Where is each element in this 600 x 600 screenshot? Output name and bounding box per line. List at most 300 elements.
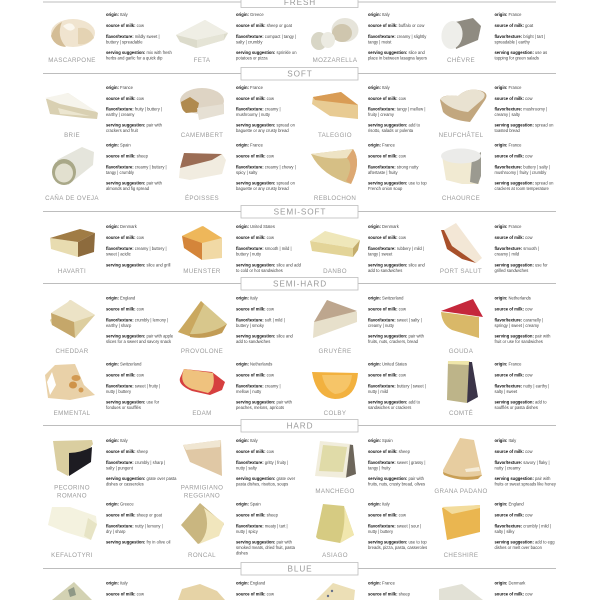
details: taleggio: Italy: [381, 85, 391, 90]
details: port salut: France: [507, 224, 522, 229]
details: havarti: creamy | buttery |: [134, 246, 167, 251]
details: reblochon: cow: [397, 154, 406, 158]
details: chaource: spread on: [534, 180, 554, 186]
details: muenster: to cold or hot sandwiches: [236, 268, 283, 273]
details: grana padano: savory | flaky |: [522, 460, 550, 465]
details: chaource: cow: [524, 154, 532, 158]
icon: blue cheese 2: [178, 584, 225, 600]
details: havarti: flavor/texture:: [106, 246, 134, 251]
details: cana de oveja: creamy | buttery |: [134, 164, 167, 170]
details: havarti: source of milk:: [106, 235, 135, 240]
name: provolone: PROVOLONE: [181, 348, 223, 355]
details: blue 3: sheep: [397, 592, 411, 596]
details: camembert: creamy |: [264, 106, 281, 112]
details: epoisses: cow: [265, 154, 274, 158]
icon: gruyere: [313, 300, 357, 338]
details: pecorino romano: Italy: [119, 438, 129, 443]
details: cheddar: England: [119, 296, 136, 300]
details: grana padano: serving suggestion:: [494, 476, 534, 481]
details: asiago: sweet | sour |: [396, 524, 421, 528]
details: parmigiano reggiano: flavor/texture:: [236, 460, 264, 465]
details: danbo: Denmark: [381, 224, 400, 229]
details: comte: source of milk:: [494, 372, 524, 378]
details: roncal: nutty | spicy: [236, 529, 259, 534]
card: havarti: [50, 224, 171, 275]
details: parmigiano reggiano: grate over: [275, 476, 296, 481]
details: manchego: pair with: [407, 476, 425, 481]
details: provolone: slice and: [275, 334, 294, 338]
details: neufchatel: creamy | salty: [494, 112, 521, 117]
details: muenster: serving suggestion:: [236, 262, 275, 268]
details: havarti: serving suggestion:: [106, 262, 145, 268]
details: chevre: origin:: [494, 12, 507, 17]
card: emmental: [45, 362, 160, 417]
details: neufchatel: toasted bread: [494, 128, 521, 133]
details: gruyere: sweet | salty |: [396, 318, 422, 322]
details: neufchatel: cow: [524, 96, 532, 101]
icon: epoisses: [179, 153, 226, 180]
details: asiago: cow: [397, 512, 406, 518]
details: asiago: use to top: [407, 540, 427, 544]
details: provolone: add to sandwiches: [236, 339, 270, 344]
details: roncal: source of milk:: [236, 512, 265, 518]
details: mascarpone: buttery | spreadable: [106, 40, 143, 44]
details: colby: United States: [381, 362, 407, 366]
details: edam: source of milk:: [236, 372, 265, 378]
name: chevre: CHÈVRE: [447, 57, 475, 64]
details: grana padano: flavor/texture:: [494, 460, 522, 465]
details: blue 4: origin:: [494, 580, 507, 586]
details: brie: flavor/texture:: [106, 106, 134, 112]
details: grana padano: fruits or sweet spreads like honey: [494, 482, 557, 486]
details: brie: crackers and fruit: [106, 128, 139, 133]
details: kefalotyri: serving suggestion:: [106, 540, 145, 544]
details: reblochon: source of milk:: [368, 154, 397, 158]
details: provolone: origin:: [236, 296, 249, 300]
details: cheddar: cow: [135, 306, 144, 312]
icon: cheddar: [50, 300, 95, 338]
name: manchego: MANCHEGO: [315, 488, 355, 495]
details: emmental: sweet | fruity |: [134, 384, 160, 388]
details: brie: serving suggestion:: [106, 122, 145, 128]
details: gruyere: serving suggestion:: [368, 334, 407, 338]
icon: feta: [176, 20, 228, 48]
details: parmigiano reggiano: cow: [265, 449, 274, 454]
name: kefalotyri: KEFALOTYRI: [51, 552, 93, 559]
section heading: semi-hard: SEMI-HARD: [273, 280, 327, 289]
details: brie: source of milk:: [106, 96, 135, 101]
details: colby: add to: [407, 400, 421, 404]
details: mozzarella: serving suggestion:: [368, 50, 407, 55]
icon: cana de oveja: [52, 147, 94, 185]
details: manchego: tangy | fruity: [368, 466, 391, 470]
details: grana padano: cow: [524, 449, 532, 454]
details: blue 3: source of milk:: [368, 592, 397, 596]
details: epoisses: flavor/texture:: [236, 164, 264, 170]
details: emmental: Switzerland: [119, 362, 142, 366]
details: feta: source of milk:: [236, 23, 265, 28]
details: epoisses: source of milk:: [236, 154, 265, 158]
icon: havarti: [50, 229, 95, 257]
details: cheddar: serving suggestion:: [106, 334, 145, 338]
details: cheddar: source of milk:: [106, 306, 135, 312]
details: comte: nutty | earthy |: [522, 384, 549, 388]
section heading: fresh: [43, 0, 556, 8]
details: mascarpone: serving suggestion:: [106, 50, 145, 55]
details: port salut: use for: [534, 262, 548, 268]
details: colby: source of milk:: [368, 372, 397, 378]
icon: muenster: [182, 226, 222, 260]
card: blue 3: [316, 580, 411, 600]
details: chaource: mushroomy | fruity | crumbly: [494, 170, 547, 175]
details: kefalotyri: source of milk:: [106, 512, 135, 518]
details: gruyere: Switzerland: [381, 296, 404, 300]
icon: edam: [180, 369, 225, 395]
details: cheshire: source of milk:: [494, 512, 524, 518]
card: cheshire: [442, 502, 555, 559]
details: muenster: cow: [265, 235, 274, 240]
details: feta: sprinkle on: [275, 50, 297, 55]
details: gouda: fruit or use for sandwiches: [494, 339, 543, 344]
details: comte: salty | sweet: [494, 389, 518, 394]
details: blue 1: source of milk:: [106, 592, 135, 596]
details: gruyere: source of milk:: [368, 306, 397, 312]
details: gouda: origin:: [494, 296, 507, 300]
card: pecorino romano: [53, 438, 177, 500]
name: port salut: PORT SALUT: [440, 268, 482, 275]
details: parmigiano reggiano: serving suggestion:: [236, 476, 275, 481]
details: edam: cow: [265, 372, 274, 378]
details: port salut: cow: [524, 235, 532, 240]
icon: emmental: [45, 364, 95, 400]
card: roncal: [181, 502, 296, 559]
section heading: semi-hard: [43, 278, 556, 290]
details: danbo: flavor/texture:: [368, 246, 396, 251]
details: neufchatel: serving suggestion:: [494, 122, 534, 128]
details: brie: fruity | buttery |: [134, 106, 162, 112]
name: roncal: RONCAL: [188, 552, 216, 559]
details: brie: earthy | creamy: [106, 112, 135, 117]
details: kefalotyri: origin:: [106, 502, 119, 506]
details: gouda: source of milk:: [494, 306, 524, 312]
details: comte: add to: [534, 400, 547, 404]
details: blue 2: source of milk:: [236, 592, 265, 596]
details: chevre: serving suggestion:: [494, 50, 534, 55]
details: mascarpone: flavor/texture:: [106, 34, 134, 39]
details: cheddar: earthy | sharp: [106, 323, 132, 328]
details: muenster: source of milk:: [236, 235, 265, 240]
name: asiago: ASIAGO: [322, 552, 348, 559]
details: taleggio: tangy | mellow |: [396, 106, 425, 112]
details: cana de oveja: serving suggestion:: [106, 180, 145, 186]
details: colby: origin:: [368, 362, 381, 366]
details: asiago: serving suggestion:: [368, 540, 407, 544]
details: blue 1: Italy: [119, 580, 129, 586]
details: roncal: serving suggestion:: [236, 540, 275, 544]
name: edam: EDAM: [192, 410, 212, 417]
details: blue 2: cow: [265, 592, 274, 596]
card: taleggio: [312, 85, 425, 139]
details: danbo: origin:: [368, 224, 381, 229]
details: kefalotyri: sheep or goat: [135, 512, 163, 518]
details: mozzarella: tangy | moist: [368, 40, 392, 44]
details: emmental: nutty | buttery: [106, 389, 132, 394]
details: roncal: pair with: [275, 540, 293, 544]
details: muenster: slice and add: [275, 262, 302, 268]
details: feta: salty | crumbly: [236, 40, 263, 44]
details: camembert: source of milk:: [236, 96, 265, 101]
details: chevre: France: [507, 12, 522, 17]
details: blue 4: Denmark: [507, 580, 526, 586]
details: cana de oveja: sheep: [135, 154, 149, 158]
name: gruyere: GRUYÈRE: [318, 348, 352, 355]
details: mozzarella: flavor/texture:: [368, 34, 396, 39]
icon: camembert: [180, 88, 224, 120]
details: manchego: serving suggestion:: [368, 476, 407, 481]
details: parmigiano reggiano: Italy: [249, 438, 259, 443]
section heading: blue: BLUE: [288, 565, 312, 574]
details: roncal: flavor/texture:: [236, 524, 264, 528]
details: edam: origin:: [236, 362, 249, 366]
details: cheshire: cow: [524, 512, 532, 518]
details: taleggio: origin:: [368, 85, 381, 90]
details: gruyere: origin:: [368, 296, 381, 300]
card: chaource: [441, 142, 554, 202]
name: pecorino romano: PECORINO: [54, 484, 90, 492]
details: provolone: Italy: [249, 296, 259, 300]
details: gouda: flavor/texture:: [494, 318, 522, 322]
details: emmental: cow: [135, 372, 144, 378]
details: camembert: origin:: [236, 85, 249, 90]
card: chevre: [440, 12, 547, 64]
details: reblochon: France: [381, 142, 396, 148]
details: reblochon: aftertaste | fruity: [368, 170, 399, 175]
icon: kefalotyri: [48, 507, 97, 540]
details: epoisses: origin:: [236, 142, 249, 148]
name: taleggio: TALEGGIO: [318, 132, 352, 139]
details: cana de oveja: Spain: [119, 142, 131, 148]
name: parmigiano reggiano: REGGIANO: [184, 492, 220, 500]
details: gruyere: flavor/texture:: [368, 318, 396, 322]
icon: roncal: [181, 503, 224, 544]
details: neufchatel: spread on: [534, 122, 554, 128]
details: taleggio: serving suggestion:: [368, 122, 407, 128]
details: taleggio: flavor/texture:: [368, 106, 396, 112]
details: epoisses: spread on: [275, 180, 296, 186]
icon: pecorino romano: [53, 440, 93, 476]
details: mascarpone: herbs and garlic for a quick dip: [106, 56, 163, 60]
icon: parmigiano reggiano: [183, 440, 222, 476]
details: blue 4: source of milk:: [494, 592, 524, 596]
details: roncal: origin:: [236, 502, 249, 506]
details: mozzarella: slice and: [407, 50, 426, 55]
details: chaource: France: [507, 142, 522, 148]
card: grana padano: [434, 438, 557, 495]
name: grana padano: GRANA PADANO: [434, 488, 488, 495]
details: brie: origin:: [106, 85, 119, 90]
icon: brie: [45, 93, 98, 119]
name: neufchatel: NEUFCHÂTEL: [439, 132, 484, 139]
details: reblochon: origin:: [368, 142, 381, 148]
details: gruyere: creamy | nutty: [368, 323, 395, 328]
details: danbo: source of milk:: [368, 235, 397, 240]
details: muenster: United States: [249, 224, 275, 229]
details: pecorino romano: grate over pasta: [145, 476, 177, 481]
name: colby: COLBY: [324, 410, 346, 417]
icon: neufchatel: [440, 90, 486, 122]
details: comte: flavor/texture:: [494, 384, 522, 388]
details: grana padano: pair with: [534, 476, 551, 481]
details: edam: serving suggestion:: [236, 400, 275, 404]
details: reblochon: strong nutty: [396, 164, 419, 170]
details: mascarpone: mix with fresh: [145, 50, 173, 55]
details: cana de oveja: flavor/texture:: [106, 164, 134, 170]
section heading: semi-soft: SEMI-SOFT: [274, 208, 326, 217]
icon: cheshire: [442, 505, 480, 540]
details: gouda: pair with: [534, 334, 551, 338]
details: taleggio: source of milk:: [368, 96, 397, 101]
details: epoisses: spicy | salty: [236, 170, 258, 175]
details: cana de oveja: origin:: [106, 142, 119, 148]
details: camembert: France: [249, 85, 264, 90]
details: kefalotyri: dry | sharp: [106, 529, 126, 534]
details: grana padano: source of milk:: [494, 449, 524, 454]
details: asiago: source of milk:: [368, 512, 397, 518]
name: gouda: GOUDA: [449, 348, 474, 355]
details: muenster: buttery | nutty: [236, 252, 262, 256]
details: parmigiano reggiano: gritty | fruity |: [264, 460, 288, 465]
details: emmental: use for: [145, 400, 160, 404]
details: cheddar: slices for a sweet and savory snack: [106, 339, 172, 344]
details: comte: France: [507, 362, 522, 366]
details: edam: creamy |: [264, 384, 281, 388]
details: cheshire: salty | silky: [494, 529, 515, 534]
icon: manchego: [315, 441, 356, 478]
details: asiago: nutty | buttery: [368, 529, 394, 534]
details: kefalotyri: flavor/texture:: [106, 524, 134, 528]
details: roncal: smoked meats, dried fruit, pasta: [236, 545, 296, 550]
details: mascarpone: mildly sweet |: [134, 34, 160, 39]
section heading: soft: SOFT: [287, 70, 313, 79]
details: camembert: cow: [265, 96, 274, 101]
name: emmental: EMMENTAL: [54, 410, 91, 417]
details: parmigiano reggiano: nutty | salty: [236, 466, 258, 470]
details: blue 2: England: [249, 580, 266, 586]
details: cheshire: serving suggestion:: [494, 540, 534, 544]
details: provolone: source of milk:: [236, 306, 265, 312]
details: brie: cow: [135, 96, 144, 101]
details: chaource: serving suggestion:: [494, 180, 534, 186]
icon: blue cheese 4: [439, 584, 483, 600]
name: pecorino romano: ROMANO: [57, 492, 87, 500]
details: gruyere: fruits, nuts, crackers, bread: [368, 339, 419, 344]
icon: taleggio: [312, 92, 358, 119]
icon: blue cheese 1: [52, 582, 92, 600]
details: camembert: serving suggestion:: [236, 122, 275, 128]
card: blue 1: [52, 580, 144, 600]
details: feta: compact | tangy |: [264, 34, 296, 39]
details: asiago: breads, pizza, pasta, casseroles: [368, 545, 427, 550]
details: cana de oveja: source of milk:: [106, 154, 135, 158]
name: mascarpone: MASCARPONE: [48, 57, 96, 64]
details: neufchatel: France: [507, 85, 522, 90]
details: gruyere: cow: [397, 306, 406, 312]
details: reblochon: flavor/texture:: [368, 164, 396, 170]
details: pecorino romano: salty | pungent: [106, 466, 134, 470]
details: taleggio: cow: [397, 96, 406, 101]
details: manchego: sheep: [397, 449, 411, 454]
card: gouda: [441, 296, 551, 355]
details: comte: serving suggestion:: [494, 400, 534, 404]
details: taleggio: risotto, salads or polenta: [368, 128, 414, 133]
card: blue 4: [439, 580, 532, 600]
name: chaource: CHAOURCE: [442, 195, 480, 202]
name: danbo: DANBO: [323, 268, 347, 275]
details: provolone: cow: [265, 306, 274, 312]
details: pecorino romano: origin:: [106, 438, 119, 443]
details: chevre: flavor/texture:: [494, 34, 522, 39]
details: port salut: flavor/texture:: [494, 246, 522, 251]
details: comte: soufflés or pasta dishes: [494, 405, 538, 410]
details: gouda: Netherlands: [507, 296, 531, 300]
details: roncal: Spain: [249, 502, 261, 506]
details: cheddar: origin:: [106, 296, 119, 300]
section heading: soft: [43, 68, 556, 80]
details: mozzarella: creamy | slightly: [396, 34, 427, 39]
details: havarti: sweet | acidic: [106, 252, 131, 256]
details: comte: origin:: [494, 362, 507, 366]
details: danbo: cow: [397, 235, 406, 240]
details: pecorino romano: sheep: [135, 449, 149, 454]
details: asiago: flavor/texture:: [368, 524, 396, 528]
details: manchego: origin:: [368, 438, 381, 443]
details: provolone: serving suggestion:: [236, 334, 275, 338]
icon: gouda: [441, 299, 483, 338]
section heading: hard: [43, 420, 556, 432]
icon: chevre: [440, 18, 481, 50]
details: neufchatel: flavor/texture:: [494, 106, 522, 112]
details: cheshire: dishes or melt over bacon: [494, 545, 543, 550]
details: blue 3: France: [381, 580, 396, 586]
details: reblochon: serving suggestion:: [368, 180, 407, 186]
details: edam: pair with: [275, 400, 293, 404]
details: emmental: fondues or soufflés: [106, 405, 141, 410]
details: havarti: cow: [135, 235, 144, 240]
details: manchego: fruits, nuts, crusty bread, olives: [368, 482, 425, 486]
details: roncal: dishes: [236, 550, 248, 556]
details: blue 2: origin:: [236, 580, 249, 586]
details: asiago: Italy: [381, 502, 391, 506]
details: danbo: rubbery | mild |: [396, 246, 424, 251]
details: gouda: serving suggestion:: [494, 334, 534, 338]
details: gouda: springy | sweet | creamy: [494, 323, 540, 328]
card: camembert: [180, 85, 296, 139]
details: blue 3: origin:: [368, 580, 381, 586]
details: pecorino romano: serving suggestion:: [106, 476, 145, 481]
icon: port salut: [441, 223, 482, 263]
icon: mascarpone: [51, 19, 95, 47]
details: blue 1: cow: [135, 592, 144, 596]
details: parmigiano reggiano: pasta dishes, risottos, soups: [236, 482, 288, 486]
details: cheddar: crumbly | lemony |: [134, 318, 168, 322]
details: brie: France: [119, 85, 134, 90]
name: camembert: CAMEMBERT: [181, 132, 223, 139]
details: blue 4: cow: [524, 592, 532, 596]
details: edam: Netherlands: [249, 362, 272, 366]
icon: provolone: [178, 301, 227, 338]
details: mozzarella: Italy: [381, 12, 391, 17]
icon: mozzarella: [311, 18, 358, 50]
